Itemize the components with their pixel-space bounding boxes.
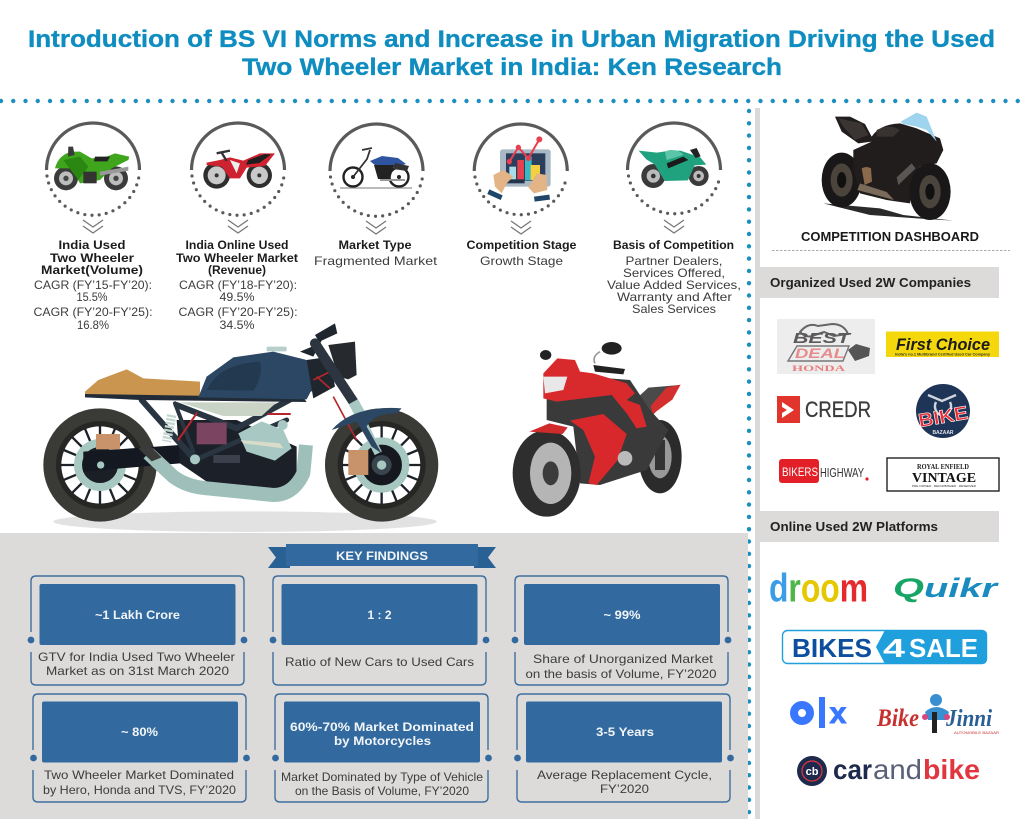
card: motorcycles share [272,694,492,802]
heading: India Online Used [186,238,288,252]
rear wheel [43,408,157,522]
logo: Bike Jinni: AUTOMOBILE BAZAAR [954,730,999,735]
frame and shock [142,383,320,460]
card: motorcycles share: on the Basis of Volume, FY’2020 [295,784,469,798]
circle frame [46,123,140,233]
logo: Bikes 4 Sale: 4 [883,633,906,663]
heading: Market Type [338,238,412,252]
card: 1 lakh crore: ~1 Lakh Crore [95,608,180,622]
section heading: Organized Used 2W Companies [770,275,971,290]
panel: organized used 2W companies [760,267,999,491]
logo: Royal Enfield Vintage: PRE OWNED . REFURBISHED . RESERVED [912,484,977,488]
values: 16.8% [77,318,109,332]
logo: Bike Jinni [876,694,999,735]
metric: India Online Used Two Wheeler Market revenue: (Revenue) [208,263,266,277]
circle frame [474,124,567,234]
title: Two Wheeler Market in India: Ken Research [242,54,782,81]
metric: India Online Used Two Wheeler Market revenue [176,123,298,332]
heading: Competition Stage [466,238,577,252]
card: 80 percent: Two Wheeler Market Dominated [44,768,234,782]
card: 1 lakh crore: Market as on 31st March 2020 [46,664,229,678]
values [34,278,152,332]
value list: Value Added Services, [607,278,741,292]
title: Introduction of BS VI Norms and Increase in Urban Migration Driving the Used [28,26,995,53]
logo: Bike Jinni: Jinni [945,706,992,732]
value list: Services Offered, [623,266,725,280]
logo: Bike Jinni: Bike [876,705,919,732]
value list [607,254,741,316]
value list: Partner Dealers, [626,254,722,268]
section heading: Online Used 2W Platforms [770,519,938,534]
card: motorcycles share: by Motorcycles [334,734,431,748]
card: motorcycles share: Market Dominated by Type of Vehicle [281,770,483,784]
panel: online used 2W platforms [760,511,999,786]
card: unorganized share: Share of Unorganized Market [533,652,714,666]
logo: carandbike: car [833,754,872,785]
card: ratio [270,576,489,685]
logo: First Choice [886,332,999,357]
circle frame [628,123,720,233]
banner [268,544,496,568]
logo: OLX: x [830,697,847,730]
swingarm [83,445,180,472]
values: 15.5% [76,290,108,304]
card: ratio: Ratio of New Cars to Used Cars [285,655,474,669]
icon: blue motorcycle [340,148,412,189]
logo: Quikr: Q uikr [893,573,999,603]
metric: market type [314,124,438,268]
logo: First Choice: India’s no.1 Multibrand Certified Used Car Company [895,352,990,356]
card: unorganized share: ~ 99% [604,608,641,622]
logo: droom: droom [769,566,868,610]
illustration: black sports motorcycle [822,113,953,221]
values: CAGR (FY’20-FY’25): [178,305,298,319]
metric: India Used Two Wheeler Market volume: Market(Volume) [41,263,143,277]
card: 80 percent [30,694,250,802]
logo: Royal Enfield Vintage [887,458,999,491]
logo: Bikes 4 Sale: BIKES [792,633,872,663]
logo: Royal Enfield Vintage: ROYAL ENFIELD [917,463,969,471]
under-seat panel [180,402,277,416]
card: 80 percent: ~ 80% [121,725,158,739]
logo: OLX [794,697,847,730]
values: 34.5% [220,318,255,332]
logo: Bikes 4 Sale: SALE [909,633,978,663]
logo: Bike Bazaar [916,384,970,438]
card: replacement cycle: FY’2020 [600,782,649,796]
metric: India Used Two Wheeler Market volume [34,123,152,332]
headlight and steering [328,342,357,379]
front wheel [325,408,438,522]
card: 1 lakh crore: GTV for India Used Two Wheeler [38,650,235,664]
heading: Basis of Competition [613,238,734,252]
value: Growth Stage [480,254,563,268]
icon: tablet chart with hands [487,136,551,202]
logo: Bike Bazaar: BIKE [917,403,970,432]
logo: CREDR [777,396,871,423]
logo: Bike Bazaar: BAZAAR [932,430,954,436]
logo: First Choice: First Choice [896,335,990,354]
logo: Best Deal Honda: DEAL [795,345,845,361]
card: motorcycles share: 60%-70% Market Dominated [290,720,474,734]
value list: Warranty and After [617,290,732,304]
values [178,278,298,332]
logo: Royal Enfield Vintage: VINTAGE [912,471,976,486]
card: unorganized share: on the basis of Volume, FY’2020 [526,667,717,681]
icon: red motorcycle [203,151,275,189]
heading: competition dashboard: COMPETITION DASHBOARD [801,229,979,244]
values: CAGR (FY’20-FY’25): [34,305,152,319]
metric: India Online Used Two Wheeler Market revenue: Two Wheeler Market [176,251,298,265]
fork [315,343,353,402]
values: CAGR (FY’15-FY’20): [34,278,152,292]
value: Fragmented Market [314,254,438,268]
card: replacement cycle: Average Replacement Cycle, [537,768,712,782]
card: 80 percent: by Hero, Honda and TVS, FY’2020 [43,783,236,797]
seat [85,369,200,397]
title [28,26,995,81]
icon: green motorcycle [54,147,129,190]
card: unorganized share [512,576,731,685]
illustration: red sports motorcycle [513,342,682,517]
banner: KEY FINDINGS [336,549,428,563]
card: replacement cycle: 3-5 Years [596,725,654,739]
section heading [760,267,999,298]
logo: Best Deal Honda: BEST [793,330,853,347]
logo: carandbike [797,754,980,786]
logo: carandbike: and [873,754,922,785]
logo: Best Deal Honda: HONDA [792,364,845,373]
circle frame [192,123,284,233]
fender [332,408,402,453]
logo: Bikers Highway: HIGHWAY [820,465,864,480]
illustration: cafe racer motorcycle [43,323,438,532]
card: replacement cycle [514,694,734,802]
values: CAGR (FY’18-FY’20): [179,278,297,292]
section heading [760,511,999,542]
icon: teal motorcycle [639,148,709,188]
value list: Sales Services [632,302,716,316]
engine [177,420,297,492]
metric: India Used Two Wheeler Market volume: Two Wheeler [50,251,134,265]
metric: basis of competition [607,123,741,316]
metric: competition stage [466,124,577,268]
exhaust [148,445,306,495]
values: 49.5% [220,290,255,304]
logo: Bikes 4 Sale [782,630,987,664]
logo: Best Deal Honda [777,319,875,374]
logo: carandbike: bike [923,754,980,785]
logo: Bikers Highway [779,459,869,483]
card: 1 lakh crore [28,576,247,685]
heading: India Used [58,238,126,252]
logo: Bikers Highway: BIKERS [782,465,818,479]
logo: carandbike: cb [806,766,819,778]
tank [198,352,315,399]
card: ratio: 1 : 2 [367,608,392,622]
logo: CREDR: CREDR [805,397,871,422]
circle frame [330,124,423,234]
panel: key findings [0,533,748,819]
